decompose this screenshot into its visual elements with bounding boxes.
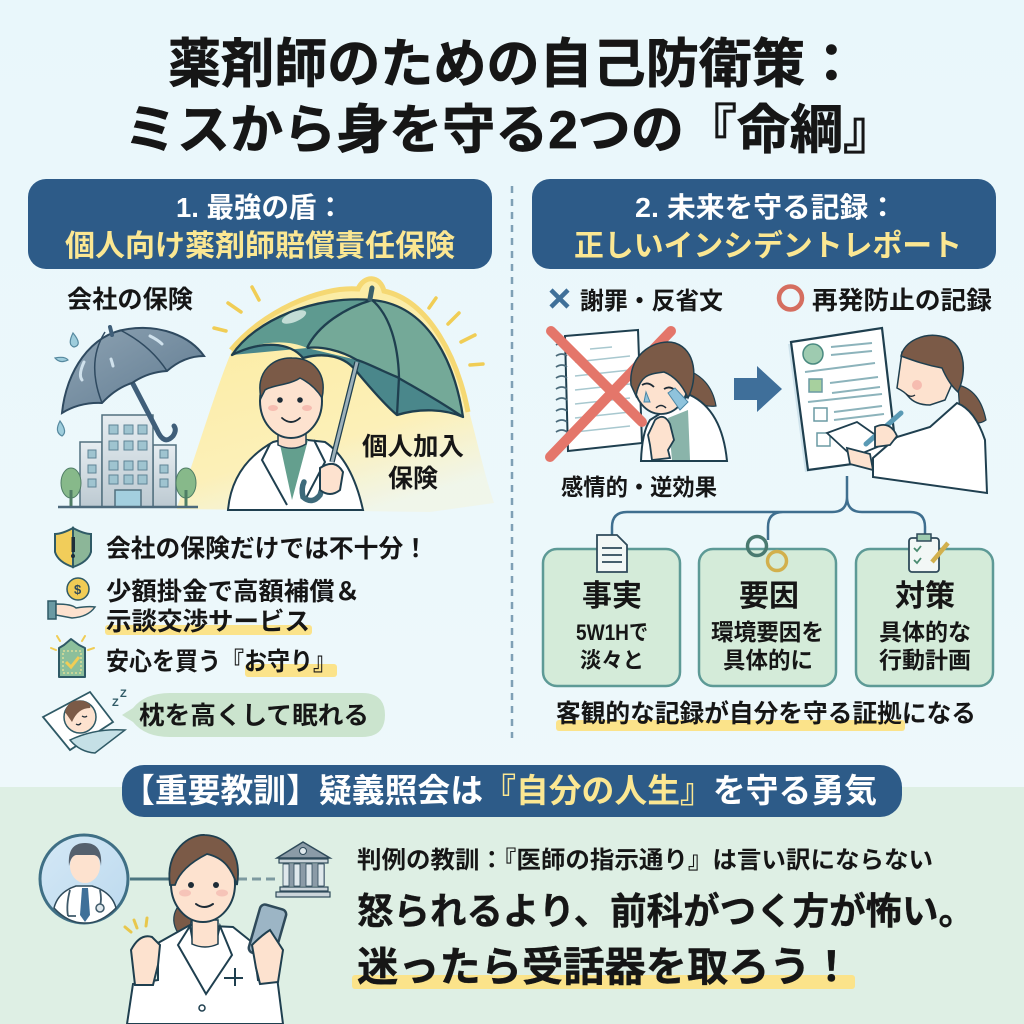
text: court case lesson: 判例の教訓：『医師の指示通り』は言い訳にならない [357, 847, 933, 874]
heading: record protecting future: 正しいインシデントレポート [574, 229, 962, 263]
panel: personal insurance [28, 179, 494, 753]
highlight: pick up the phone [352, 975, 855, 989]
figure: confident pharmacist [125, 835, 287, 1024]
connector: pharmacist to court [238, 878, 277, 880]
heading: strongest shield: 1. 最強の盾： [176, 192, 344, 223]
icon: clipboard and pen [909, 534, 948, 572]
card: facts: 事実 [582, 580, 642, 613]
highlight: charm [245, 664, 337, 677]
bottom lesson band background [0, 787, 1024, 1024]
figure: pharmacist under umbrella [228, 358, 363, 510]
connector: report to three elements [612, 476, 925, 540]
icon: document [597, 535, 627, 572]
card: countermeasures: 行動計画 [879, 647, 971, 673]
highlight: negotiation service [105, 625, 312, 635]
icon: company building [58, 415, 198, 507]
icon: glow rim [231, 279, 468, 412]
title: ミスから身を守る2つの『命綱』 [124, 101, 896, 160]
icon: courthouse [276, 842, 330, 897]
icon: gray rainy umbrella [55, 327, 204, 440]
banner: important lesson: 【重要教訓】疑義照会は『自分の人生』を守る勇気 [122, 772, 877, 809]
heading: record protecting future: 2. 未来を守る記録： [635, 192, 897, 223]
icon: report sheet [788, 328, 897, 472]
label: personal insurance [362, 433, 464, 493]
card: countermeasures: 対策 [895, 580, 955, 613]
icon: sleeping person: Z [112, 697, 119, 709]
heading: strongest shield: 個人向け薬剤師賠償責任保険 [65, 230, 455, 263]
card: causes: 環境要因を [711, 619, 824, 645]
card: causes [699, 536, 836, 686]
card: countermeasures: 具体的な [879, 619, 971, 645]
title [124, 35, 896, 160]
text: objective record protects you: 客観的な記録が自分を守る証拠になる [556, 699, 976, 728]
text: pick up the phone: 迷ったら受話器を取ろう！ [357, 944, 852, 990]
card: causes: 要因 [739, 580, 799, 613]
text: low premium and negotiation service: 少額掛金で高額補償＆ [106, 578, 360, 606]
icon: doctor portrait [40, 835, 128, 923]
icon: yellow protective glow [177, 278, 494, 512]
label: prevention record: 再発防止の記録 [812, 287, 992, 315]
icon: sparkle rays [214, 287, 483, 365]
text: low premium and negotiation service [106, 578, 360, 636]
label: company insurance: 会社の保険 [67, 286, 193, 314]
label: personal insurance: 保険 [388, 465, 438, 493]
card: facts [543, 535, 680, 686]
label: emotional, counterproductive: 感情的・逆効果 [561, 474, 717, 500]
icon: cross mark [551, 290, 568, 307]
icon: sleeping person: Z [120, 688, 127, 700]
icon: coin and hand [48, 578, 95, 619]
card: causes: 具体的に [723, 647, 813, 673]
label: personal insurance: 個人加入 [362, 433, 464, 461]
icon: sleeping person [43, 688, 127, 753]
text: company insurance is not enough: 会社の保険だけでは不十分！ [106, 535, 428, 563]
center dashed divider [511, 186, 513, 738]
card: countermeasures [856, 534, 993, 686]
icon: shield warning [55, 528, 91, 567]
text: buy peace of mind: 安心を買う『お守り』 [106, 648, 336, 676]
icon: linked rings [748, 536, 786, 570]
icon: crossed out notebook [550, 330, 671, 457]
figure: crying pharmacist [631, 342, 727, 461]
callout: sleep well [122, 693, 385, 737]
heading: record protecting future [532, 179, 996, 269]
icon: circle mark [779, 286, 802, 310]
arrow: before to after [734, 366, 782, 412]
text: scarier than being scolded: 怒られるより、前科がつく方が怖い。 [357, 891, 975, 932]
icon: coin and hand: $ [74, 582, 82, 597]
icon: big green umbrella [232, 288, 463, 417]
card: facts: 淡々と [580, 648, 644, 673]
icon: charm tag [51, 636, 94, 677]
connector: doctor to pharmacist [130, 878, 170, 880]
card: facts: 5W1Hで [576, 620, 648, 645]
banner: important lesson [122, 765, 902, 817]
label: apology letter: 謝罪・反省文 [580, 288, 723, 315]
panel: incident report [532, 179, 996, 731]
text: low premium and negotiation service: 示談交渉サービス [106, 608, 310, 636]
callout: sleep well: 枕を高くして眠れる [139, 702, 369, 730]
figure: writing pharmacist [827, 335, 987, 493]
heading: strongest shield [28, 179, 492, 269]
title: 薬剤師のための自己防衛策： [168, 35, 858, 94]
highlight: objective record [556, 720, 905, 731]
